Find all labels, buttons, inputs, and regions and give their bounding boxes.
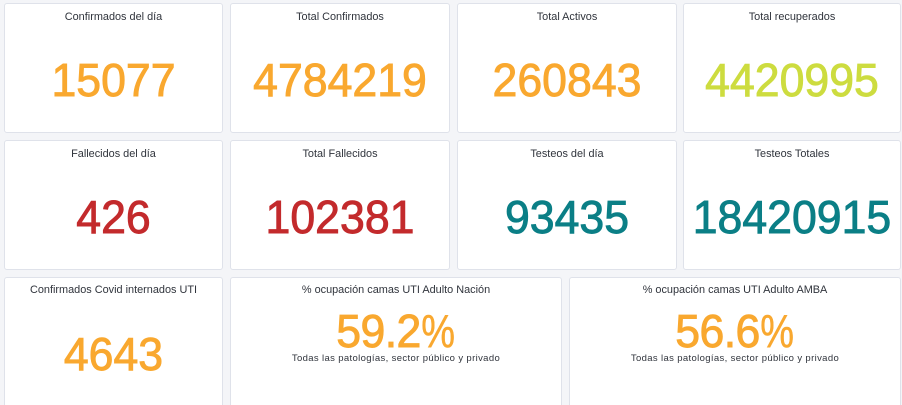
heading: Fallecidos del día	[71, 148, 156, 160]
heading: Testeos del día	[530, 148, 604, 160]
value: 4784219	[253, 54, 427, 106]
panel: Total Activos	[457, 3, 677, 133]
heading: Total recuperados	[749, 11, 835, 23]
panel: Testeos Totales	[683, 140, 901, 270]
value: %	[421, 305, 455, 357]
panel: Total recuperados	[683, 3, 901, 133]
value: 102381	[266, 191, 414, 243]
value: 59.2	[336, 305, 421, 357]
panel: ocupación camas UTI Adulto Nación	[230, 277, 562, 405]
heading: Confirmados Covid internados UTI	[30, 284, 197, 296]
heading: Total Fallecidos	[302, 148, 378, 160]
heading: Total Activos	[537, 11, 597, 23]
panel: ocupación camas UTI Adulto AMBA	[569, 277, 901, 405]
panel: Fallecidos del día	[4, 140, 223, 270]
value: 93435	[505, 191, 629, 243]
heading: Confirmados del día	[65, 11, 162, 23]
value: 4420995	[705, 54, 879, 106]
heading: % ocupación camas UTI Adulto Nación	[302, 284, 490, 296]
value: 426	[76, 191, 151, 243]
panel: Confirmados Covid internados UTI	[4, 277, 223, 405]
heading: % ocupación camas UTI Adulto AMBA	[643, 284, 827, 296]
value: 4643	[64, 328, 163, 380]
heading: Testeos Totales	[755, 148, 829, 160]
panel: Testeos del día	[457, 140, 677, 270]
note: Todas las patologías, sector público y privado	[292, 353, 500, 364]
value: 260843	[493, 54, 641, 106]
heading: Total Confirmados	[296, 11, 384, 23]
value: %	[760, 305, 794, 357]
value: 56.6	[675, 305, 760, 357]
value: 15077	[51, 54, 176, 106]
note: Todas las patologías, sector público y privado	[631, 353, 839, 364]
panel: Confirmados del día	[4, 3, 223, 133]
panel: Total Confirmados	[230, 3, 450, 133]
value: 18420915	[693, 191, 891, 243]
panel: Total Fallecidos	[230, 140, 450, 270]
